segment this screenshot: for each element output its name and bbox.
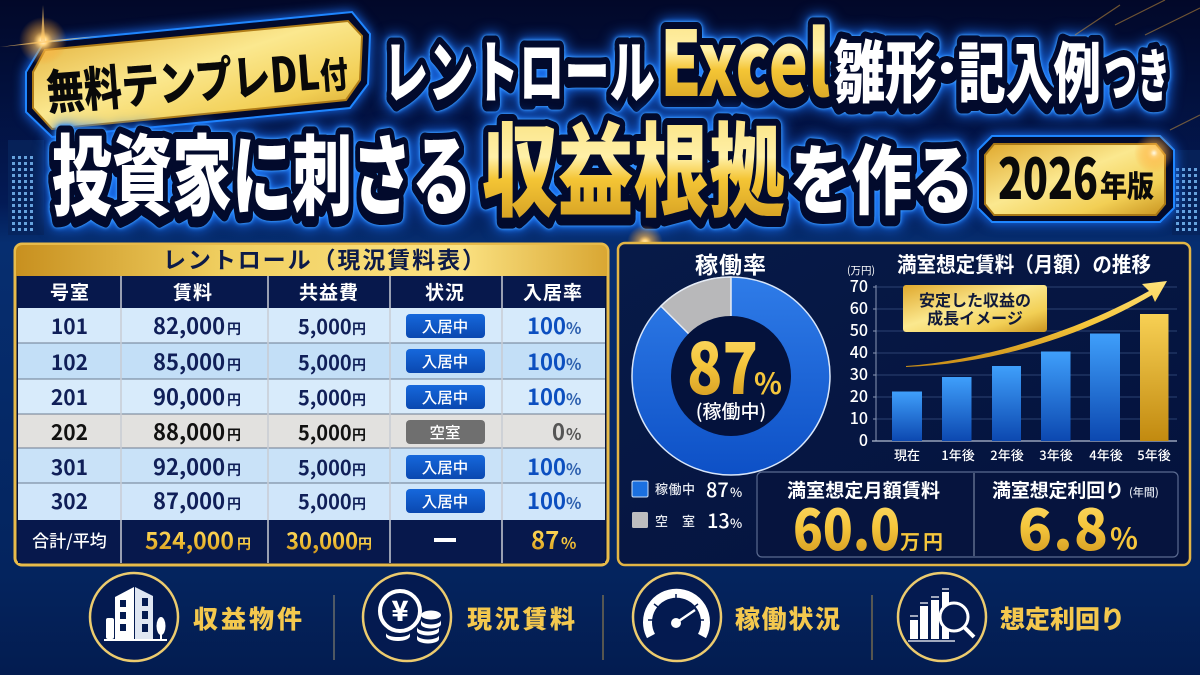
edition badge: 年版 [1100,162,1154,206]
table rows: 円 [352,355,366,375]
donut legend: 13 [707,505,730,534]
callout: growth image [903,285,1047,332]
KPI: monthly rent [787,476,943,567]
KPI: yield [992,476,1159,567]
table rows: 入居中 [422,386,468,408]
table rows: 0 [552,415,565,447]
table rows: 301 [51,452,88,482]
table rows: 円 [227,460,241,480]
table footer totals: 円 [237,534,251,554]
table rows: 入居中 [422,350,468,372]
table rows: 円 [227,319,241,339]
table rows: 88,000 [153,415,225,447]
KPI: monthly rent: 万円 [900,526,943,555]
bar chart: 1年後 [941,445,975,464]
table footer totals: 524,000 [145,522,234,556]
table header row: 入居率 [523,278,583,305]
table rows: 87,000 [153,484,225,516]
donut chart: % [754,361,782,403]
bar chart: 70 [850,273,868,297]
title line 2 [52,91,974,238]
title line 2: 投資家に刺さる [52,107,472,234]
table header row: 賃料 [173,278,213,305]
table rows: 201 [51,382,88,412]
donut chart: (稼働中) [696,397,766,424]
table rows: 5,000 [298,417,352,446]
table rows: 入居中 [422,315,468,337]
table header row: 共益費 [299,278,359,305]
table footer totals: 30,000 [286,524,358,556]
table rows: 円 [227,355,241,375]
icon: gauge [633,573,721,661]
left city silhouette [8,140,44,235]
table rows: 5,000 [298,347,352,376]
table header row [18,276,605,308]
bar chart: 40 [850,339,868,363]
bar chart: 60 [850,295,868,319]
feature: expected yield [898,573,1125,661]
table rows: 円 [352,494,366,514]
panel header [16,241,607,276]
table rows: 入居中 [422,456,468,478]
title line 1 [383,0,1170,122]
table rows: 90,000 [153,380,225,412]
table rows: % [566,351,581,375]
table rows: 円 [227,390,241,410]
top badge: free template: 無料テンプレDL付 [44,31,350,124]
table rows: 82,000 [153,309,225,341]
table rows: 100 [527,484,566,516]
KPI: yield: 満室想定利回り [992,476,1124,503]
KPI: yield: 6.8 [1018,486,1108,567]
icon: building [90,573,178,661]
donut legend: 稼働中 [655,479,695,498]
title line 2: 収益根拠 [482,91,785,238]
table rows: 5,000 [298,486,352,515]
panel: rent roll [15,241,608,565]
edition badge: 2026 [998,135,1098,216]
bar chart [847,263,1177,464]
table rows: % [566,456,581,480]
feature: current rent [363,573,575,661]
table rows: % [566,386,581,410]
KPI box [757,472,1178,567]
feature: occupancy status [633,573,840,661]
table rows: 302 [51,486,88,516]
title line 1: 雛形 [833,18,937,117]
dividers [334,595,872,660]
table footer totals [18,520,605,563]
table rows: % [566,490,581,514]
title line 2: を作る [790,120,974,230]
donut legend: 87 [706,474,729,503]
table rows: % [566,421,581,445]
callout: growth image: 安定した収益の [919,287,1031,311]
bar chart: 現在 [894,445,920,464]
table rows: 円 [352,460,366,480]
table rows: 102 [51,347,88,377]
label: 稼働状況 [735,600,840,636]
panel header: レントロール（現況賃料表） [163,241,485,275]
icon: yen coins: ¥ [391,590,409,630]
table rows: 円 [352,390,366,410]
table footer totals: 合計/平均 [32,527,107,552]
table footer totals: 87 [531,521,559,556]
table rows: 100 [527,309,566,341]
KPI: monthly rent: 満室想定月額賃料 [787,476,940,503]
feature: income property [90,573,302,661]
table rows: 5,000 [298,382,352,411]
title line 1: レントロール [383,18,655,117]
donut chart: 87 [687,314,758,415]
table header row: 号室 [50,278,90,305]
bar chart: 5年後 [1137,445,1171,464]
table footer totals: % [561,530,576,554]
panel: occupancy and rent trend [618,243,1190,567]
bar chart: 30 [850,361,868,385]
bar chart: 2年後 [990,445,1024,464]
occupancy heading: 稼働率 [695,246,767,280]
callout: growth image: 成長イメージ [927,305,1023,329]
table rows: 空室 [429,421,461,443]
KPI: yield: (年間) [1129,484,1159,500]
donut legend: % [730,513,742,532]
table header row: 状況 [425,278,465,305]
table rows: 5,000 [298,452,352,481]
table footer totals: 円 [358,534,372,554]
label: 想定利回り [1000,600,1125,636]
table rows [18,308,605,520]
table rows: % [566,315,581,339]
table rows: 100 [527,450,566,482]
donut chart [632,277,830,475]
sparkle flares [0,0,1200,261]
KPI: yield: % [1110,516,1138,558]
bar chart: (万円) [847,263,875,278]
table rows: 5,000 [298,311,352,340]
bar chart: 3年後 [1039,445,1073,464]
table rows: 円 [352,319,366,339]
bar chart: 0 [859,427,868,451]
table rows: 100 [527,345,566,377]
donut legend: 空 室 [655,511,695,530]
table rows: 101 [51,311,88,341]
right city silhouette [1172,150,1200,235]
bar chart: 10 [850,405,868,429]
donut legend: % [730,482,742,501]
table rows: 円 [227,425,241,445]
bar chart: 50 [850,317,868,341]
table rows: 入居中 [422,490,468,512]
icon: chart and magnifier [898,573,986,661]
title line 1: 記入例 [958,21,1101,117]
table rows: 85,000 [153,345,225,377]
KPI: monthly rent: 60.0 [793,486,900,567]
table rows: 92,000 [153,450,225,482]
bar chart: 4年後 [1089,445,1123,464]
label: 現況賃料 [467,600,575,636]
donut legend [632,474,742,534]
table rows: 円 [352,425,366,445]
growth arrow [906,281,1167,367]
rent trend heading: 満室想定賃料（月額）の推移 [897,249,1151,279]
edition badge [978,135,1174,222]
table rows: 円 [227,494,241,514]
icon: yen coins [363,573,451,661]
top badge: free template [26,12,370,137]
table rows: 100 [527,380,566,412]
table rows: 202 [51,417,88,447]
bar chart: 20 [850,383,868,407]
label: 収益物件 [193,600,302,636]
